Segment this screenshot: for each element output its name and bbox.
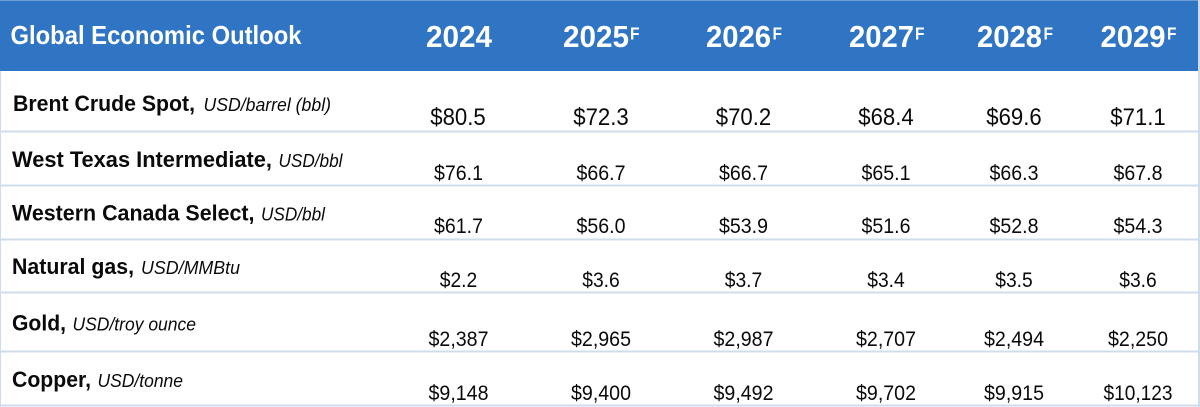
column heading: 2028 forecast: F — [1044, 24, 1053, 44]
row: Brent Crude Spot: $72.3 — [573, 104, 629, 131]
row: Brent Crude Spot: $68.4 — [858, 104, 914, 131]
row: Copper: Copper, — [12, 367, 91, 392]
row: Brent Crude Spot: $69.6 — [986, 104, 1042, 131]
row: Gold: $2,250 — [1108, 327, 1168, 351]
column heading: 2027 forecast: F — [915, 24, 925, 44]
column heading: 2028 forecast: 2028 — [977, 20, 1042, 54]
row: Western Canada Select: USD/bbl — [261, 204, 326, 224]
row: Western Canada Select: $51.6 — [862, 214, 911, 238]
row: Copper: $9,400 — [571, 381, 631, 405]
row: West Texas Intermediate: $76.1 — [434, 161, 483, 185]
row: Brent Crude Spot — [0, 91, 1198, 132]
column heading: 2024: 2024 — [426, 20, 492, 54]
header band — [0, 0, 1198, 71]
row: Brent Crude Spot: $80.5 — [430, 104, 486, 131]
column heading: 2025 forecast: F — [630, 24, 640, 44]
column heading: 2025 forecast: 2025 — [563, 20, 629, 54]
row: Brent Crude Spot: USD/barrel (bbl) — [204, 95, 331, 115]
column heading: 2027 forecast: 2027 — [849, 20, 914, 54]
row: Gold — [0, 310, 1198, 352]
row: West Texas Intermediate — [0, 147, 1198, 186]
row: Western Canada Select: $52.8 — [990, 214, 1039, 238]
row: Natural gas: $3.6 — [1119, 268, 1157, 292]
column heading: 2029 forecast: F — [1167, 24, 1177, 44]
row: Copper — [0, 367, 1198, 406]
row: West Texas Intermediate: West Texas Intermediate, — [12, 147, 272, 172]
row: West Texas Intermediate: $66.3 — [990, 161, 1039, 185]
row: Western Canada Select — [0, 200, 1198, 240]
row: Brent Crude Spot: $71.1 — [1110, 104, 1166, 131]
row: Gold: USD/troy ounce — [72, 314, 196, 334]
row: Western Canada Select: $53.9 — [719, 214, 768, 238]
column heading: 2026 forecast: 2026 — [706, 20, 771, 54]
row: Western Canada Select: $54.3 — [1114, 214, 1163, 238]
row: Gold: $2,494 — [984, 327, 1044, 351]
row: West Texas Intermediate: $66.7 — [576, 161, 626, 185]
row: Gold: $2,707 — [856, 327, 916, 351]
row: West Texas Intermediate: $66.7 — [719, 161, 768, 185]
row: Gold: $2,387 — [428, 327, 488, 351]
row: Western Canada Select: $56.0 — [576, 214, 626, 238]
row: Brent Crude Spot: Brent Crude Spot, — [13, 91, 195, 116]
row: West Texas Intermediate: $65.1 — [862, 161, 910, 185]
row: Copper: $9,148 — [428, 381, 489, 405]
row: Gold: $2,965 — [571, 327, 631, 351]
row: Natural gas: $3.7 — [725, 268, 762, 292]
row: Copper: $9,492 — [714, 381, 774, 405]
title: Global Economic Outlook — [10, 20, 302, 50]
row: Copper: $10,123 — [1104, 381, 1173, 405]
row: Natural gas: $3.4 — [867, 268, 905, 292]
row: Natural gas: USD/MMBtu — [141, 258, 240, 278]
row: Gold: $2,987 — [714, 327, 774, 351]
row: Western Canada Select: Western Canada Select, — [12, 200, 254, 226]
column heading: 2026 forecast: F — [772, 24, 782, 44]
row: West Texas Intermediate: USD/bbl — [278, 151, 343, 171]
row: Brent Crude Spot: $70.2 — [716, 104, 771, 131]
column heading: 2029 forecast: 2029 — [1100, 20, 1166, 54]
row: West Texas Intermediate: $67.8 — [1114, 161, 1163, 185]
row: Copper: $9,702 — [856, 381, 916, 405]
row: Natural gas: $2.2 — [440, 268, 477, 292]
row: Natural gas: $3.6 — [582, 268, 620, 292]
row: Gold: Gold, — [12, 310, 66, 336]
row: Copper: $9,915 — [984, 381, 1044, 405]
row: Natural gas: $3.5 — [995, 268, 1033, 292]
row: Natural gas — [0, 254, 1198, 294]
row: Copper: USD/tonne — [98, 371, 183, 391]
row: Natural gas: Natural gas, — [12, 254, 134, 279]
row: Western Canada Select: $61.7 — [434, 214, 483, 238]
